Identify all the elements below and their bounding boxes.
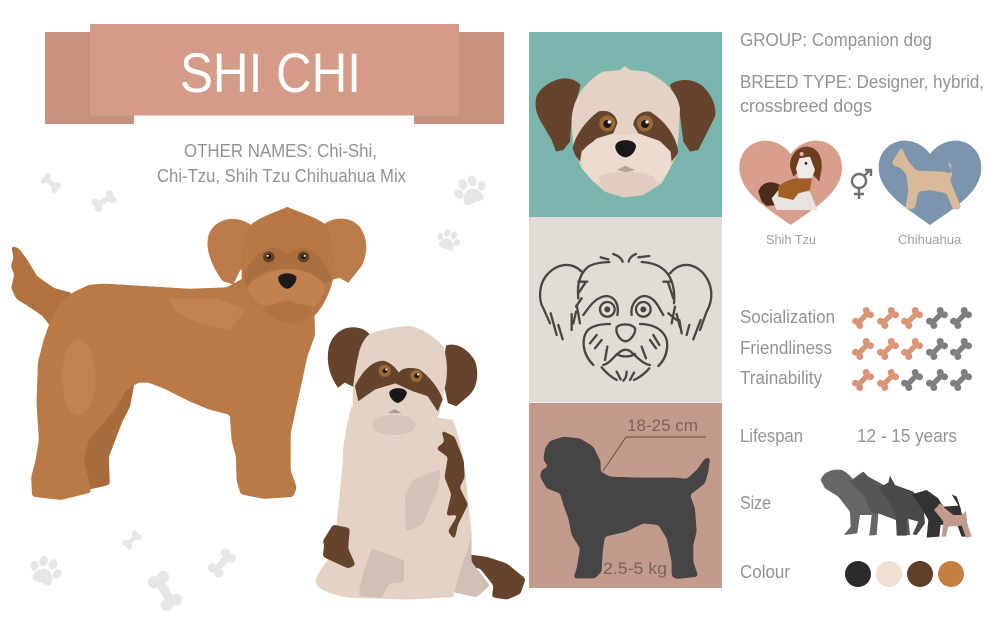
dog eyes: [263, 252, 309, 262]
face: eyes: [599, 115, 653, 131]
size comparison: Size: [740, 493, 771, 513]
illustration: sitting cream and brown dog: [316, 326, 526, 600]
dog brow shade: [244, 247, 332, 288]
panel: silhouette with height and weight: [529, 403, 722, 588]
Chihuahua label: Chihuahua: [898, 232, 962, 247]
dog muzzle: [247, 269, 325, 308]
puppy right ear: [441, 345, 477, 406]
text block: group: GROUP: Companion dog: [740, 30, 932, 50]
heading: breed name: SHI CHI: [180, 41, 361, 104]
rating bones 3 of 5: [851, 306, 973, 330]
puppy rear haunch: [453, 511, 490, 597]
colour swatches: [740, 561, 964, 587]
text block: other names: [157, 141, 406, 186]
face: head fur: [572, 66, 680, 197]
parent breed: Shih Tzu heart: [739, 141, 842, 247]
face portrait drawing: [536, 66, 715, 197]
lifespan: Lifespan: [740, 426, 803, 446]
puppy left ear: [328, 327, 370, 389]
face: mouth: [617, 166, 635, 172]
dog head: [242, 207, 334, 323]
puppy chin: [372, 415, 416, 435]
puppy eyes: [379, 365, 422, 382]
dog far rear leg: [78, 379, 135, 489]
lifespan: [740, 426, 957, 446]
puppy leg shade: [358, 548, 404, 598]
symbol: male and female: [852, 170, 871, 199]
size silhouettes: [821, 470, 972, 538]
text block: breed type: BREED TYPE: Designer, hybrid,: [740, 72, 984, 92]
rating bones 3 of 5: [851, 337, 973, 361]
heart: [739, 141, 842, 225]
dog tail: [11, 246, 73, 327]
rating: trainability: [740, 368, 973, 392]
rating: friendliness: [740, 337, 973, 361]
dog chin: [264, 301, 313, 324]
dog left ear: [207, 219, 252, 285]
colour swatches: Colour: [740, 562, 790, 582]
face: brown mask: [573, 111, 678, 162]
text block: other names: OTHER NAMES: Chi-Shi,: [184, 141, 377, 161]
face: chin: [598, 172, 658, 197]
text block: breed type: [740, 72, 984, 116]
rating: friendliness: Friendliness: [740, 338, 832, 358]
text block: other names: Chi-Tzu, Shih Tzu Chihuahua Mix: [157, 166, 406, 186]
rating: socialization: Socialization: [740, 307, 835, 327]
parent breed: Chihuahua heart: [879, 141, 981, 247]
puppy mask: [355, 361, 443, 411]
dog body: [31, 276, 315, 500]
puppy tail: [462, 554, 526, 600]
dog nose: [278, 273, 296, 289]
text block: breed type: crossbreed dogs: [740, 96, 872, 116]
puppy left patch: [320, 525, 356, 569]
background decorations: paws and bones: [24, 171, 492, 613]
puppy body: [316, 406, 472, 600]
title banner: [45, 24, 504, 125]
line art drawing: [540, 254, 711, 381]
size comparison: [740, 470, 972, 538]
lifespan: 12 - 15 years: [857, 426, 957, 446]
face: left ear: [536, 78, 581, 152]
face: right ear: [670, 80, 715, 152]
dog thigh highlight: [62, 340, 95, 415]
weight label: 2.5-5 kg: [603, 559, 667, 578]
puppy side shade: [405, 469, 441, 532]
height label: 18-25 cm: [627, 416, 698, 435]
Chihuahua drawing: [891, 146, 962, 210]
face: nose: [615, 140, 636, 157]
Shih Tzu label: Shih Tzu: [766, 232, 816, 247]
illustration: standing orange dog: [11, 207, 366, 500]
rating: trainability: Trainability: [740, 368, 822, 388]
silhouette dog: [540, 437, 710, 579]
puppy back streak: [436, 430, 468, 540]
puppy head: [353, 326, 447, 438]
height leader line: [603, 437, 706, 471]
puppy mouth: [388, 409, 402, 413]
panel: teal face portrait: [529, 32, 722, 218]
Shih Tzu drawing: [758, 147, 822, 210]
face: muzzle: [582, 134, 671, 182]
rating: socialization: [740, 306, 973, 330]
dog right ear: [324, 219, 366, 283]
panel: line art face: [529, 217, 722, 402]
dog shoulder highlight: [168, 298, 245, 330]
puppy nose: [389, 388, 407, 403]
heart: [879, 141, 981, 225]
rating bones 2 of 5: [851, 368, 973, 392]
